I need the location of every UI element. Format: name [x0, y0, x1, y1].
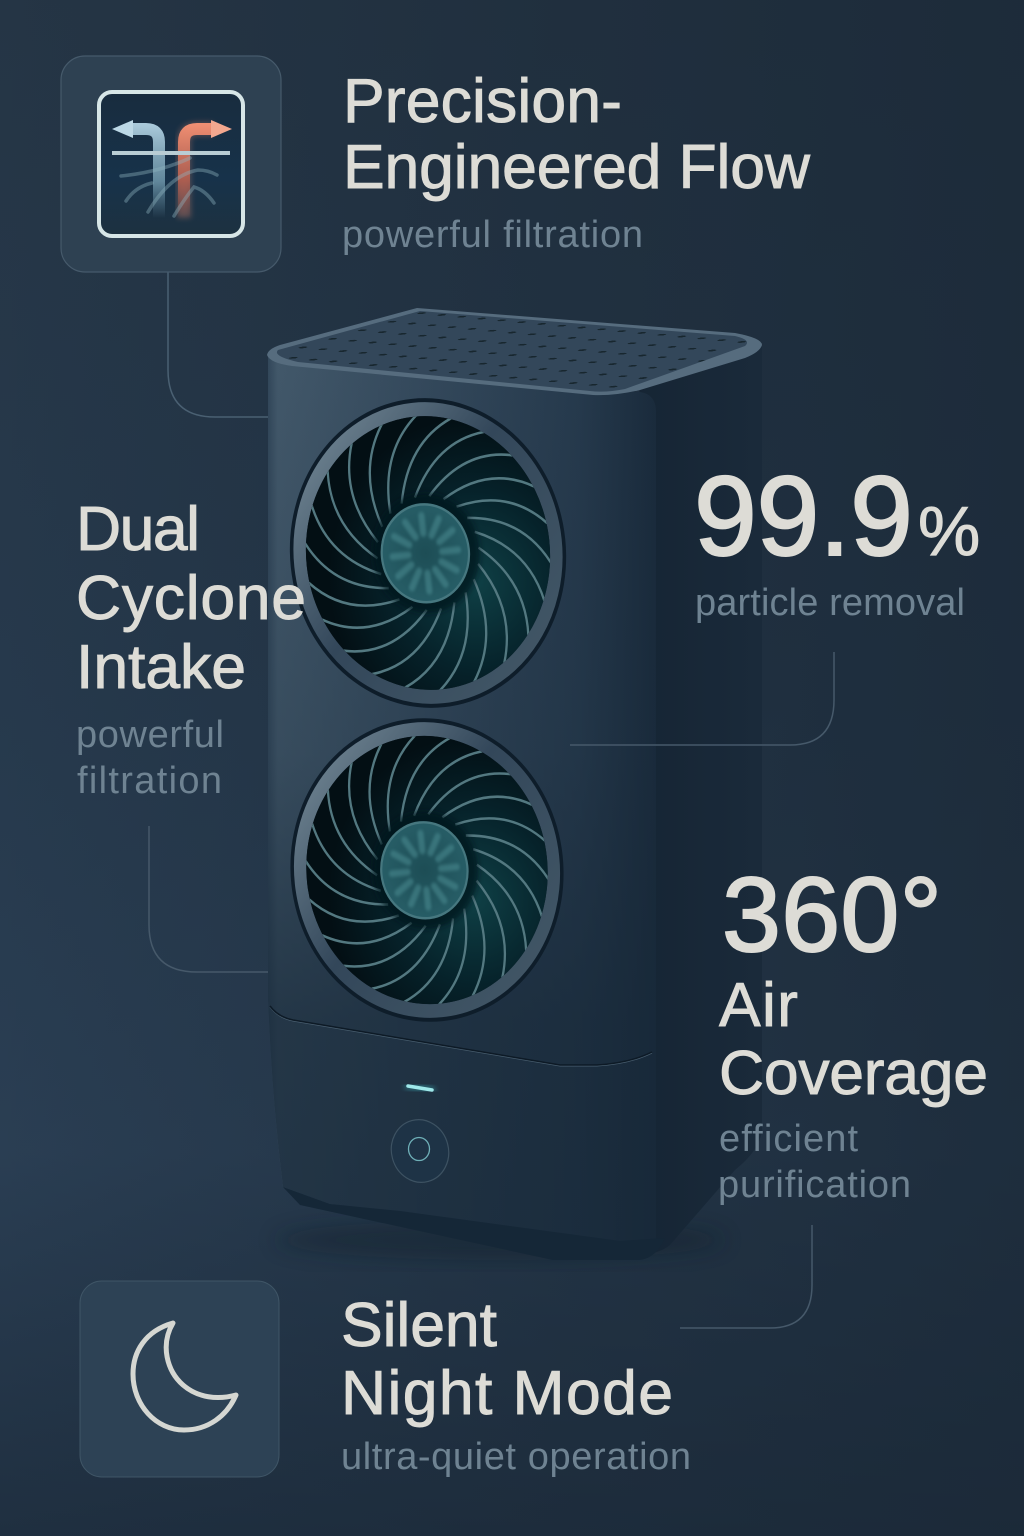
subtext: particle removal: particle removal [695, 582, 965, 624]
heading: silent night mode [341, 1290, 673, 1428]
connector: flow icon to product [168, 272, 268, 417]
heading: air coverage: Coverage [719, 1038, 988, 1108]
stat: percent sign: % [918, 492, 980, 570]
heading: precision-engineered flow: Engineered Flow [343, 132, 811, 202]
heading: silent night mode: Silent [341, 1290, 497, 1360]
heading: dual cyclone intake [76, 494, 306, 702]
icon: crescent moon [133, 1323, 236, 1430]
ground shadow [275, 1220, 725, 1260]
heading: dual cyclone intake: Cyclone [76, 563, 306, 633]
heading: precision-engineered flow [343, 66, 811, 202]
panel: night mode icon card [80, 1281, 279, 1477]
connector: dual cyclone label to lower fan [149, 826, 300, 972]
top panel [267, 308, 762, 395]
subtext: ultra-quiet operation: ultra-quiet operation [341, 1436, 691, 1478]
connector: 360 label to product [680, 1225, 812, 1328]
base foot [283, 1187, 665, 1260]
side face [560, 345, 762, 1260]
subtext: powerful filtration left: powerful [76, 714, 224, 756]
heading: dual cyclone intake: Intake [76, 632, 246, 702]
subtext: efficient purification [718, 1118, 911, 1206]
heading: air coverage: Air [719, 970, 798, 1040]
heading: precision-engineered flow: Precision- [343, 66, 622, 136]
lower fan [275, 705, 579, 1035]
upper fan [275, 384, 581, 722]
heading: dual cyclone intake: Dual [76, 494, 200, 564]
icon: split air flow [99, 92, 243, 236]
subtext: efficient purification: purification [718, 1164, 911, 1206]
connector: 99.9% label to product [570, 652, 834, 745]
stat: 99.9%: 99.9 [694, 453, 913, 579]
heading: silent night mode: Night Mode [341, 1358, 673, 1428]
subtext: powerful filtration left [76, 714, 224, 802]
subtext: powerful filtration: powerful filtration [342, 214, 643, 256]
front shading [268, 352, 656, 1244]
front face [268, 352, 656, 1244]
status LED [408, 1086, 432, 1090]
panel: flow icon card [61, 56, 281, 272]
seam between body and base [270, 1006, 652, 1066]
heading: air coverage [719, 970, 988, 1108]
subtext: efficient purification: efficient [719, 1118, 858, 1160]
subtext: powerful filtration left: filtration [77, 760, 222, 802]
stat: 360 degrees: 360° [722, 856, 942, 974]
product: air purifier [267, 308, 762, 1260]
power button [384, 1113, 456, 1189]
